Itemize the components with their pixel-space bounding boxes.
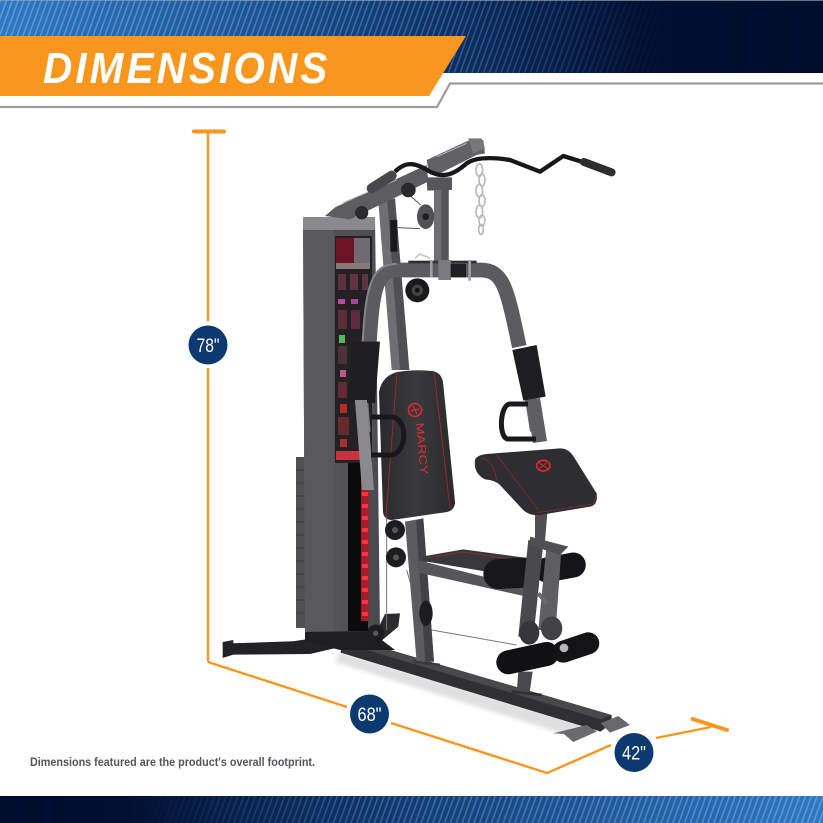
arm pad left	[348, 342, 380, 403]
arm pulley	[405, 278, 429, 302]
seat column	[405, 518, 434, 662]
preacher post	[535, 513, 547, 542]
preacher curl pad	[475, 448, 597, 515]
weight stack slot	[348, 462, 368, 631]
height dimension line	[192, 130, 226, 662]
floor shadow	[335, 652, 600, 736]
chain	[476, 164, 485, 234]
arm clamp	[408, 254, 477, 281]
lat bar	[395, 156, 582, 175]
arm assembly arch	[369, 270, 519, 347]
lat beam	[325, 165, 428, 219]
cables	[387, 517, 517, 645]
badge: 68 inches	[350, 694, 389, 734]
depth and width dimension lines	[208, 662, 727, 773]
header band	[0, 0, 823, 73]
rear foot and base, bottom section	[223, 613, 630, 742]
red selector strip	[361, 463, 369, 621]
left arm lower	[355, 400, 374, 490]
upper frame and lat tower	[325, 138, 612, 432]
lower leg rollers	[508, 643, 588, 662]
header divider line	[0, 84, 823, 107]
left arm handle	[371, 417, 404, 455]
footer band	[0, 796, 823, 823]
upper rollers	[547, 565, 573, 570]
front post	[427, 177, 452, 191]
back pad with logo: MARCY	[413, 422, 430, 476]
seat support	[417, 560, 530, 597]
arm pad right	[512, 345, 546, 401]
instruction placard	[335, 236, 372, 463]
stacked pulleys	[367, 520, 433, 642]
badge: 78 inches	[188, 326, 228, 364]
right arm lower and handle	[501, 398, 547, 443]
title: DIMENSIONS	[43, 43, 327, 92]
badge: 42 inches	[614, 733, 654, 772]
main column	[378, 198, 409, 370]
lower pulleys	[519, 616, 562, 645]
footnote: Dimensions featured are the product's overall footprint.	[30, 757, 315, 769]
badge: 78 inches: 78"	[196, 335, 220, 357]
badge: 42 inches: 42"	[622, 742, 646, 764]
title banner	[0, 36, 466, 96]
lower frame, seat and leg developer	[367, 448, 597, 695]
badge: 68 inches: 68"	[358, 704, 382, 726]
tower	[303, 217, 395, 650]
seat	[422, 549, 530, 572]
lower post	[517, 672, 533, 695]
small pulley	[417, 204, 434, 229]
leg developer frame	[518, 540, 543, 638]
back pad with logo	[379, 370, 455, 520]
weight stack	[296, 457, 306, 628]
home gym machine	[223, 138, 630, 742]
